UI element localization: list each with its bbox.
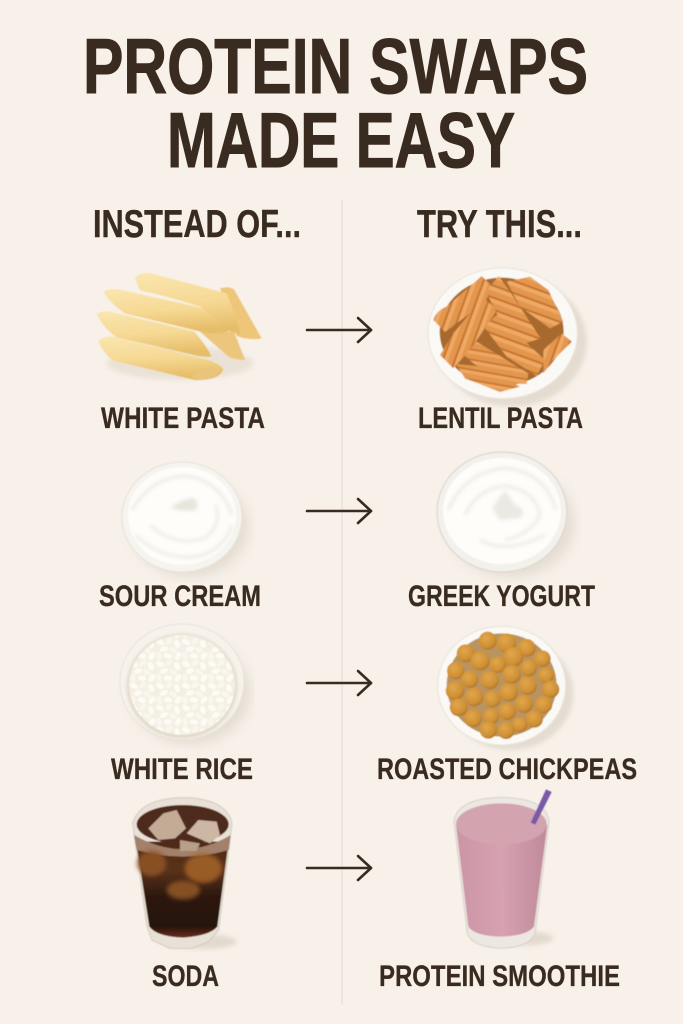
- heading: instead of: INSTEAD OF...: [93, 203, 301, 246]
- row: rice swap: [111, 624, 637, 786]
- arrow: [307, 499, 371, 523]
- arrow: [307, 671, 371, 695]
- icon: bowl of greek yogurt: [437, 452, 574, 577]
- label: greek yogurt: GREEK YOGURT: [408, 580, 595, 613]
- heading: try this: TRY THIS...: [417, 203, 582, 246]
- label: white rice: WHITE RICE: [111, 753, 253, 786]
- icon: white penne pasta: [97, 273, 262, 381]
- icon: bowl of lentil pasta: [428, 268, 587, 407]
- icon: bowl of sour cream: [122, 462, 248, 577]
- label: white pasta: WHITE PASTA: [101, 402, 265, 435]
- label: sour cream: SOUR CREAM: [99, 580, 261, 613]
- icon: protein smoothie glass with straw: [454, 789, 553, 948]
- row: cream swap: [99, 452, 595, 613]
- arrow: [307, 856, 371, 880]
- arrow: [307, 318, 371, 342]
- icon: bowl of roasted chickpeas: [438, 626, 573, 750]
- title: [83, 22, 588, 184]
- row: drink swap: [133, 789, 620, 993]
- label: lentil pasta: LENTIL PASTA: [418, 402, 583, 435]
- title: MADE EASY: [167, 96, 515, 184]
- label: protein smoothie: PROTEIN SMOOTHIE: [379, 960, 620, 993]
- icon: bowl of white rice: [120, 624, 250, 744]
- icon: glass of soda with ice: [133, 798, 237, 949]
- column divider: [341, 200, 343, 1005]
- row: pasta swap: [97, 268, 587, 435]
- label: soda: SODA: [152, 960, 219, 993]
